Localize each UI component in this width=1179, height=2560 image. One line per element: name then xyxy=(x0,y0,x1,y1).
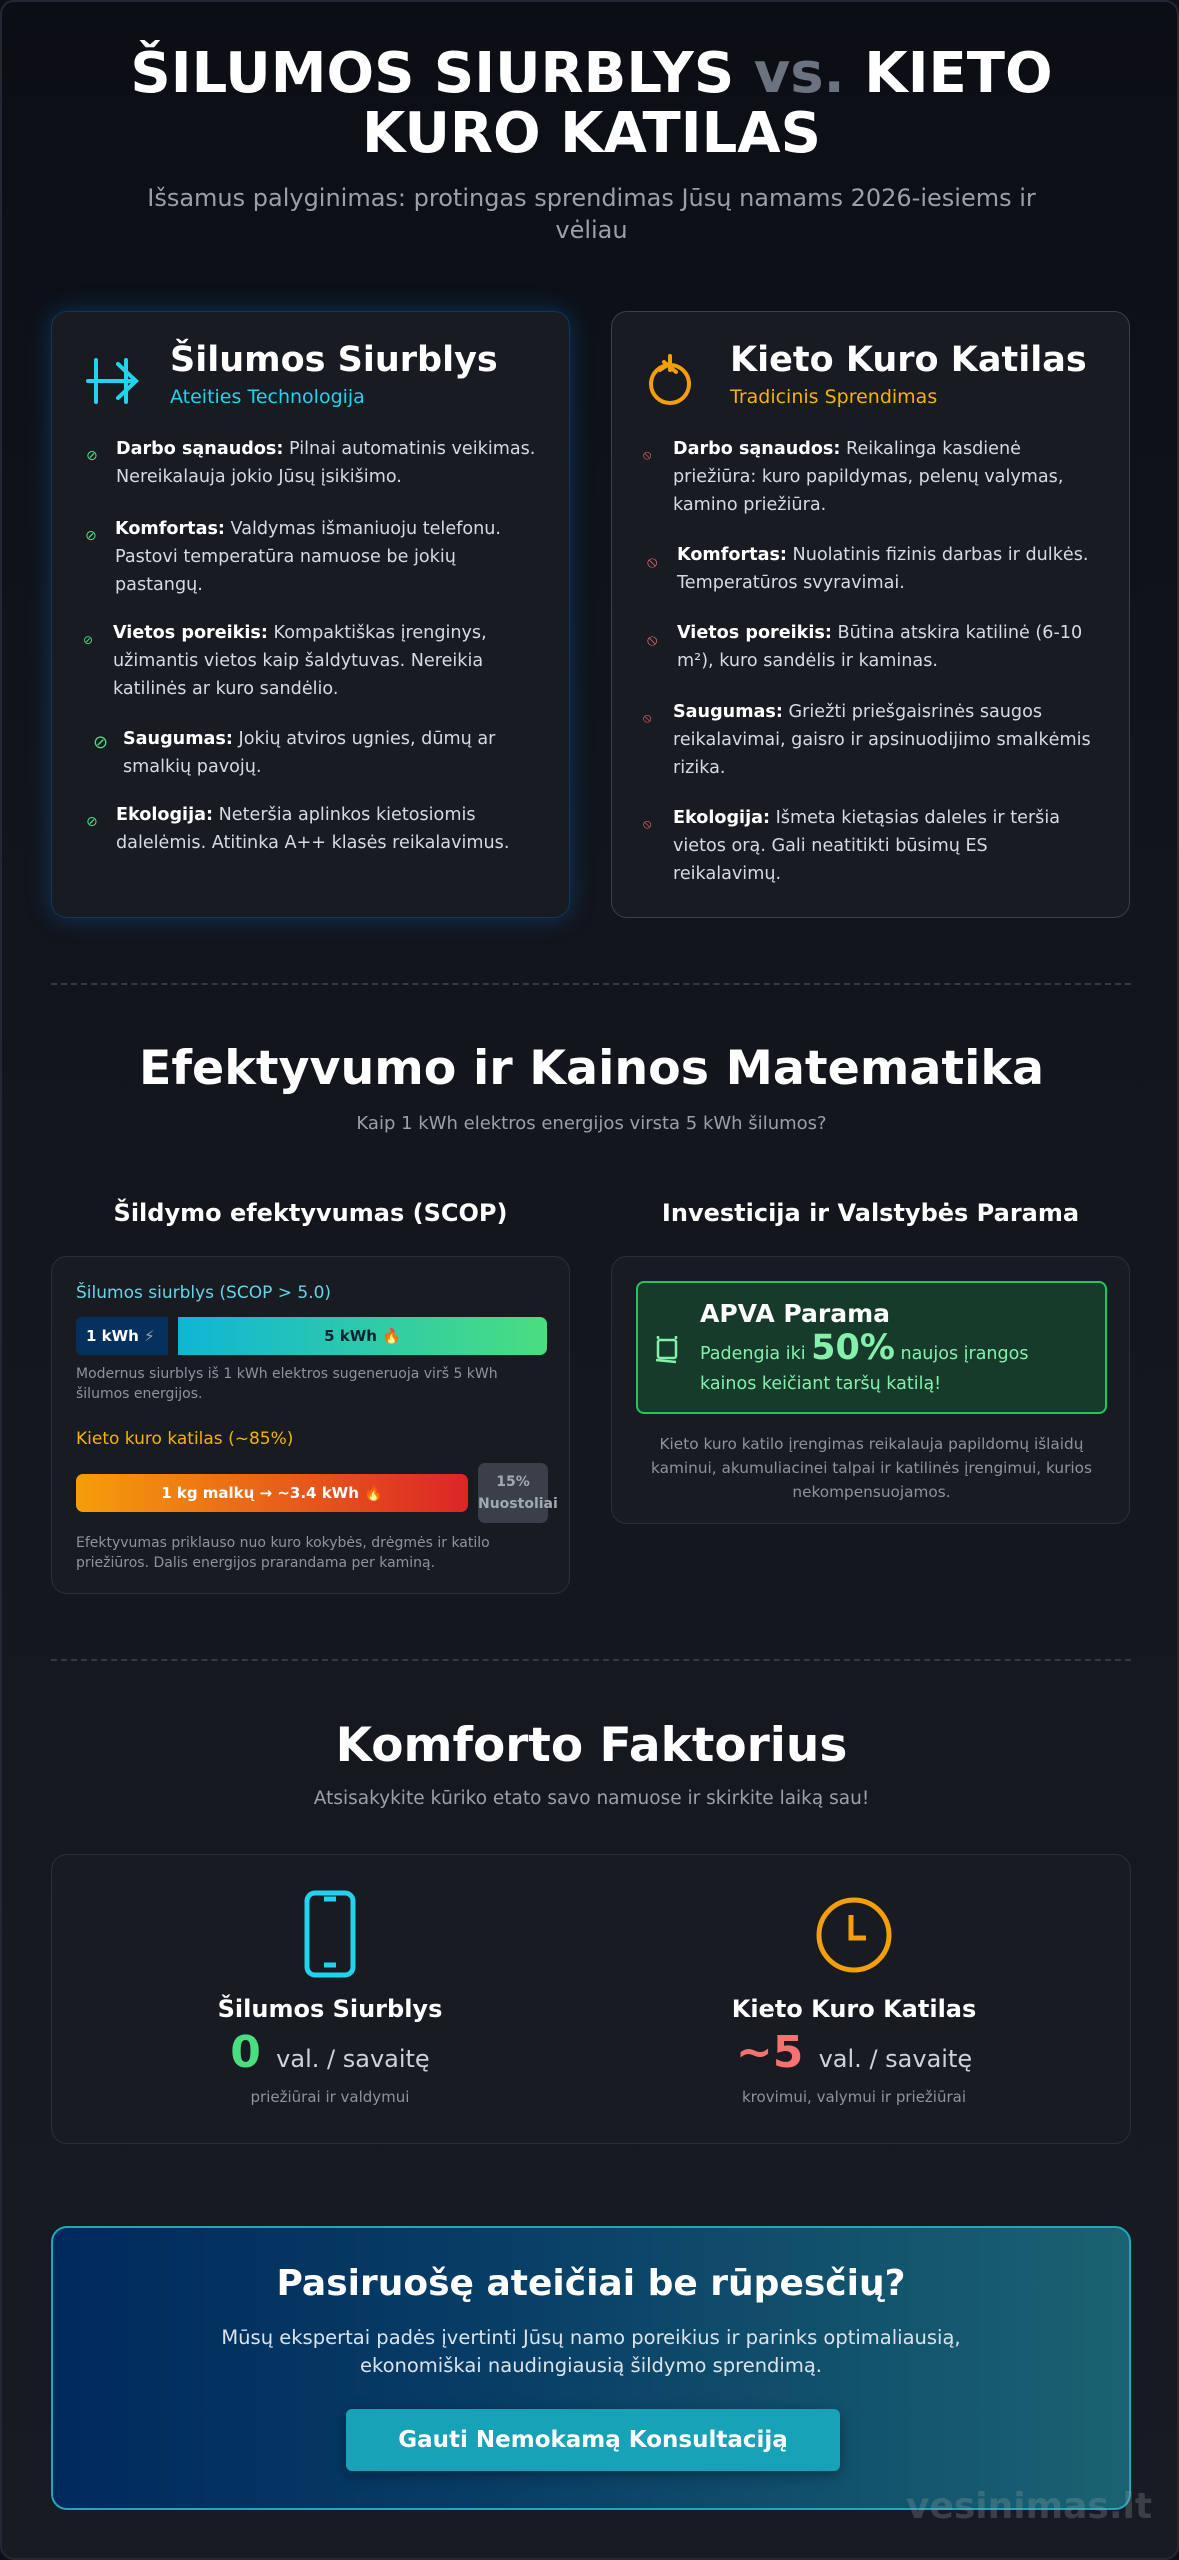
stat: boiler: Kieto Kuro Katilas xyxy=(732,1995,976,2023)
panel: efficiency chart xyxy=(51,1256,570,1594)
panel: efficiency chart: Efektyvumas priklauso nuo kuro kokybės, drėgmės ir katilo priežiūros. Dalis energijos prarandama per kaminą. xyxy=(76,1535,490,1571)
bar: boiler: Nuostoliai xyxy=(478,1496,558,1512)
bar: boiler: 15% xyxy=(496,1474,530,1490)
panel: efficiency chart: Modernus siurblys iš 1 kWh elektros sugeneruoja virš 5 kWh šilumos energijos. xyxy=(76,1366,498,1402)
bar: heat pump: 5 kWh 🔥 xyxy=(324,1327,401,1345)
list: boiler cons: Vietos poreikis: Būtina atskira katilinė (6-10 m²), kuro sandėlis ir kaminas. xyxy=(677,623,1082,671)
panel: investment: Kieto kuro katilo įrengimas reikalauja papildomų išlaidų kaminui, akumuliacinei talpai ir katilinės įrengimui, kurios nekompensuojamos. xyxy=(651,1435,1092,1501)
title xyxy=(130,40,1053,166)
stat: heat pump xyxy=(218,1994,442,2106)
callout: APVA: APVA Parama xyxy=(700,1299,890,1328)
list: boiler cons: Ekologija: Išmeta kietąsias daleles ir teršia vietos orą. Gali neatitikti būsimų ES reikalavimų. xyxy=(673,808,1060,884)
list: heat pump pros: ⊘ xyxy=(93,732,108,753)
subheading: Kaip 1 kWh elektros energijos virsta 5 kWh šilumos? xyxy=(356,1113,827,1134)
panel: solid fuel boiler: Tradicinis Sprendimas xyxy=(730,386,937,408)
button: Gauti Nemokamą Konsultaciją xyxy=(398,2427,788,2453)
list: boiler cons: ⦸ xyxy=(647,552,657,571)
bar: heat pump: 1 kWh ⚡ xyxy=(86,1327,155,1345)
column heading: SCOP: Šildymo efektyvumas (SCOP) xyxy=(114,1199,507,1227)
CTA text: ekonomiškai naudingiausią šildymo sprendimą. xyxy=(360,2354,822,2377)
watermark: vesinimas.lt xyxy=(906,2486,1152,2527)
heading: comfort: Komforto Faktorius xyxy=(336,1718,847,1773)
heading: Kieto Kuro Katilas xyxy=(730,340,1087,380)
CTA heading: Pasiruošę ateičiai be rūpesčių? xyxy=(276,2263,905,2304)
title: ŠILUMOS SIURBLYS vs. KIETO xyxy=(130,41,1053,106)
list: boiler cons: ⦸ xyxy=(643,711,651,726)
panel: heat pump: Ateities Technologija xyxy=(170,386,365,408)
icon: phone xyxy=(304,1890,356,1978)
bar: heat pump xyxy=(76,1317,547,1355)
panel: heat pump xyxy=(51,311,570,918)
stat: boiler: krovimui, valymui ir priežiūrai xyxy=(742,2088,966,2106)
list: boiler cons: ⦸ xyxy=(643,448,651,463)
heading: Šilumos Siurblys xyxy=(170,340,498,380)
list: heat pump pros: Komfortas: Valdymas išmaniuoju telefonu. Pastovi temperatūra namuose be jokių pastangų. xyxy=(115,519,501,595)
icon: money xyxy=(656,1336,678,1364)
icon: clock xyxy=(816,1898,892,1972)
stat: boiler xyxy=(732,1995,976,2106)
list: heat pump pros: Ekologija: Neteršia aplinkos kietosiomis dalelėmis. Atitinka A++ klasės reikalavimus. xyxy=(116,805,509,853)
icon: heat pump xyxy=(86,358,139,404)
panel: comfort comparison xyxy=(51,1854,1131,2144)
list: heat pump pros: ⊘ xyxy=(86,448,98,464)
list: heat pump pros: ⊘ xyxy=(85,528,97,544)
list: heat pump pros: Darbo sąnaudos: Pilnai automatinis veikimas. Nereikalauja jokio Jūsų įsikišimo. xyxy=(116,439,535,487)
list: heat pump pros: ⊘ xyxy=(83,633,93,647)
stat: heat pump: 0 val. / savaitę xyxy=(230,2027,430,2078)
list: boiler cons xyxy=(643,439,1091,884)
list: heat pump pros: Vietos poreikis: Kompaktiškas įrenginys, užimantis vietos kaip šaldytuvas. Nereikia katilinės ar kuro sandėlio. xyxy=(113,623,487,699)
icon: fire xyxy=(649,354,691,405)
stat: heat pump: priežiūrai ir valdymui xyxy=(251,2088,409,2106)
list: heat pump pros xyxy=(83,439,535,853)
stat: heat pump: Šilumos Siurblys xyxy=(218,1995,442,2023)
list: boiler cons: Saugumas: Griežti priešgaisrinės saugos reikalavimai, gaisro ir apsinuodijimo smalkėmis rizika. xyxy=(673,702,1091,778)
panel: investment xyxy=(611,1256,1130,1524)
list: boiler cons: ⦸ xyxy=(643,817,651,832)
title: KURO KATILAS xyxy=(362,101,821,166)
list: heat pump pros: Saugumas: Jokių atviros ugnies, dūmų ar smalkių pavojų. xyxy=(123,729,495,777)
subheading: Atsisakykite kūriko etato savo namuose ir skirkite laiką sau! xyxy=(314,1788,869,1809)
list: heat pump pros: ⊘ xyxy=(86,814,98,830)
list: boiler cons: Darbo sąnaudos: Reikalinga kasdienė priežiūra: kuro papildymas, pelenų valymas, kamino priežiūra. xyxy=(673,439,1063,515)
callout: APVA xyxy=(636,1281,1107,1414)
column heading: investment: Investicija ir Valstybės Parama xyxy=(662,1199,1079,1227)
CTA text: Mūsų ekspertai padės įvertinti Jūsų namo poreikius ir parinks optimaliausią, xyxy=(221,2326,961,2349)
panel: efficiency chart: Šilumos siurblys (SCOP > 5.0) xyxy=(76,1283,331,1303)
button xyxy=(346,2409,840,2471)
list: boiler cons: Komfortas: Nuolatinis fizinis darbas ir dulkės. Temperatūros svyravimai. xyxy=(677,545,1088,593)
callout: APVA: Padengia iki 50% naujos įrangos kainos keičiant taršų katilą! xyxy=(700,1328,1028,1394)
heading: efficiency math: Efektyvumo ir Kainos Matematika xyxy=(139,1041,1044,1096)
list: boiler cons: ⦸ xyxy=(647,630,657,649)
stat: boiler: ~5 val. / savaitę xyxy=(736,2027,972,2078)
CTA text xyxy=(221,2326,961,2377)
bar: boiler xyxy=(76,1463,558,1523)
bar: boiler: 1 kg malkų → ~3.4 kWh 🔥 xyxy=(161,1484,383,1502)
panel: call to action xyxy=(51,2226,1131,2510)
panel: solid fuel boiler xyxy=(611,311,1130,918)
panel: efficiency chart: Kieto kuro katilas (~85%) xyxy=(76,1429,293,1449)
subtitle: Išsamus palyginimas: protingas sprendimas Jūsų namams 2026-iesiems ir vėliau xyxy=(147,184,1036,244)
